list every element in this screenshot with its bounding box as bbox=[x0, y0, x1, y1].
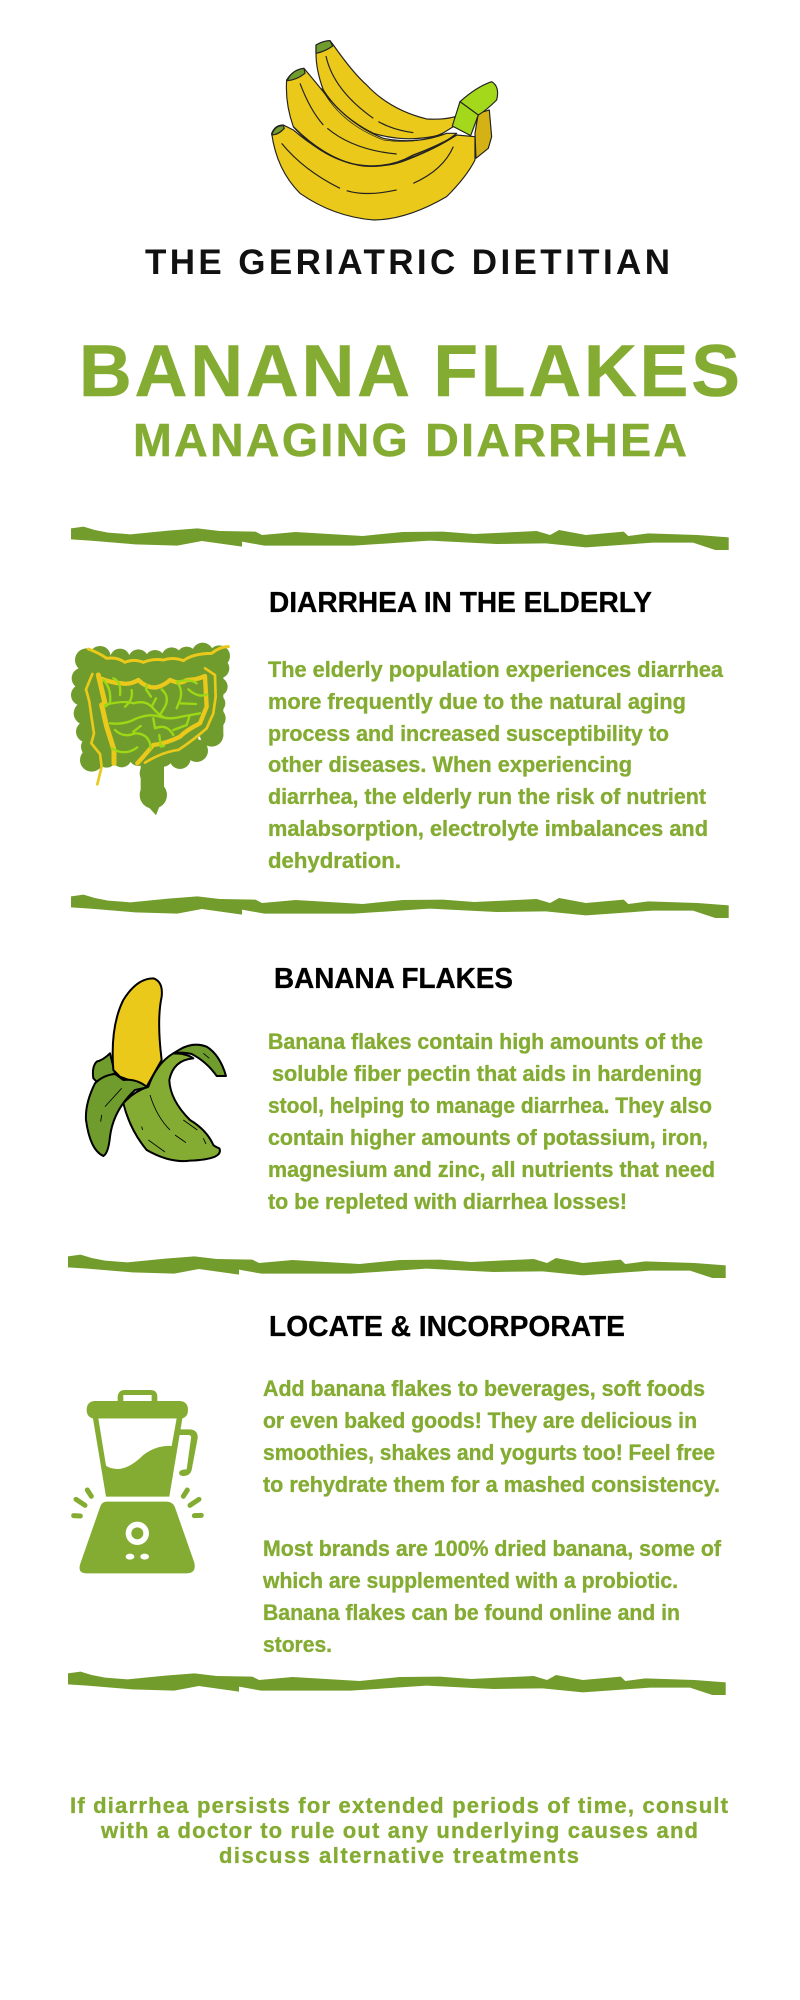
divider 1 bbox=[71, 527, 729, 550]
icon: blender bbox=[74, 1390, 201, 1573]
brand name: THE GERIATRIC DIETITIAN bbox=[145, 243, 670, 282]
body text: diarrhea in the elderly: other diseases. When experiencing bbox=[268, 752, 632, 777]
body text: diarrhea in the elderly: malabsorption, electrolyte imbalances and bbox=[268, 816, 708, 841]
body text: banana flakes: stool, helping to manage diarrhea. They also bbox=[268, 1093, 712, 1118]
body text: banana flakes: soluble fiber pectin that aids in hardening bbox=[272, 1061, 702, 1086]
footer note bbox=[70, 1793, 729, 1868]
title: BANANA FLAKES bbox=[79, 331, 740, 412]
icon: peeled banana bbox=[86, 978, 226, 1161]
body text: locate and incorporate: stores. bbox=[263, 1632, 332, 1657]
body text: diarrhea in the elderly bbox=[268, 657, 724, 873]
icon: banana bunch bbox=[272, 41, 498, 220]
divider 2 bbox=[71, 895, 729, 918]
body text: locate and incorporate: or even baked goods! They are delicious in bbox=[263, 1408, 697, 1433]
footer note: with a doctor to rule out any underlying causes and bbox=[100, 1818, 698, 1843]
divider 4 bbox=[68, 1672, 726, 1695]
heading: locate and incorporate: LOCATE & INCORPORATE bbox=[269, 1311, 625, 1343]
body text: locate and incorporate: Most brands are 100% dried banana, some of bbox=[263, 1536, 722, 1561]
body text: locate and incorporate bbox=[262, 1376, 722, 1657]
icon: intestines bbox=[71, 643, 230, 815]
body text: diarrhea in the elderly: process and increased susceptibility to bbox=[268, 721, 669, 746]
body text: banana flakes: Banana flakes contain high amounts of the bbox=[268, 1029, 703, 1054]
body text: diarrhea in the elderly: dehydration. bbox=[268, 848, 401, 873]
body text: locate and incorporate: Banana flakes can be found online and in bbox=[263, 1600, 680, 1625]
heading: banana flakes: BANANA FLAKES bbox=[274, 963, 513, 995]
body text: locate and incorporate: smoothies, shakes and yogurts too! Feel free bbox=[263, 1440, 715, 1465]
body text: locate and incorporate: Add banana flakes to beverages, soft foods bbox=[263, 1376, 705, 1401]
subtitle: MANAGING DIARRHEA bbox=[133, 414, 687, 466]
heading: diarrhea in the elderly: DIARRHEA IN THE ELDERLY bbox=[269, 587, 652, 619]
body text: banana flakes: to be repleted with diarrhea losses! bbox=[268, 1189, 627, 1214]
body text: diarrhea in the elderly: diarrhea, the elderly run the risk of nutrient bbox=[268, 784, 707, 809]
body text: banana flakes bbox=[268, 1029, 715, 1214]
body text: diarrhea in the elderly: more frequently due to the natural aging bbox=[268, 689, 686, 714]
divider 3 bbox=[68, 1255, 726, 1278]
body text: diarrhea in the elderly: The elderly population experiences diarrhea bbox=[268, 657, 724, 682]
body text: banana flakes: magnesium and zinc, all nutrients that need bbox=[268, 1157, 715, 1182]
footer note: If diarrhea persists for extended periods of time, consult bbox=[70, 1793, 729, 1818]
body text: locate and incorporate: which are supplemented with a probiotic. bbox=[262, 1568, 678, 1593]
footer note: discuss alternative treatments bbox=[219, 1843, 579, 1868]
body text: locate and incorporate: to rehydrate them for a mashed consistency. bbox=[263, 1472, 720, 1497]
body text: banana flakes: contain higher amounts of potassium, iron, bbox=[268, 1125, 708, 1150]
